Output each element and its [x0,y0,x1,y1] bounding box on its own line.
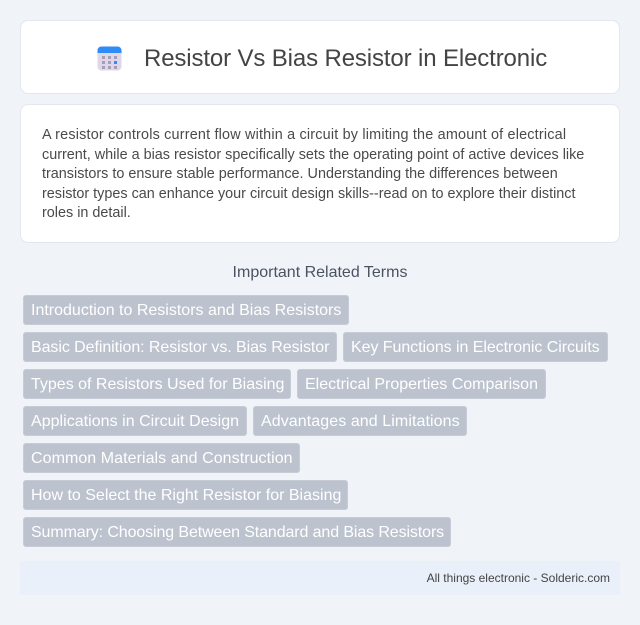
tag: Introduction to Resistors and Bias Resistors [31,302,341,319]
heading: important related terms: Important Related Terms [233,264,407,281]
tag list [23,295,608,547]
header panel [20,20,620,94]
footer text: All things electronic - Solderic.com [427,571,610,585]
text block: description: transistors to ensure stable performance. Understanding the differences between [42,166,558,182]
tag [23,443,300,473]
tag: Summary: Choosing Between Standard and Bias Resistors [31,524,444,541]
tag: Electrical Properties Comparison [305,376,538,393]
tag: Types of Resistors Used for Biasing [31,376,284,393]
text block: description: roles in detail. [42,205,131,221]
icon: calendar [98,46,122,70]
tag [297,369,546,399]
tag [23,369,291,399]
tag: Advantages and Limitations [261,413,460,430]
tag: Common Materials and Construction [31,450,293,467]
footer [20,561,620,595]
tag [343,332,608,362]
panel: description [20,104,620,243]
tag: Key Functions in Electronic Circuits [351,339,600,356]
tag [23,517,451,547]
tag [23,480,348,510]
tag [23,295,349,325]
text block: description: A resistor controls current flow within a circuit by limiting the amount of electrical [42,127,566,143]
tag [23,406,247,436]
text block: description: current, while a bias resistor specifically sets the operating point of active devices like [42,147,584,163]
tag [253,406,467,436]
tag: Basic Definition: Resistor vs. Bias Resistor [31,339,329,356]
tag: How to Select the Right Resistor for Biasing [31,487,341,504]
tag: Applications in Circuit Design [31,413,239,430]
tag [23,332,337,362]
text block: description [42,127,584,221]
title: Resistor Vs Bias Resistor in Electronic [144,45,547,72]
text block: description: resistor types can enhance your circuit design skills--read on to explore their distinct [42,186,576,202]
